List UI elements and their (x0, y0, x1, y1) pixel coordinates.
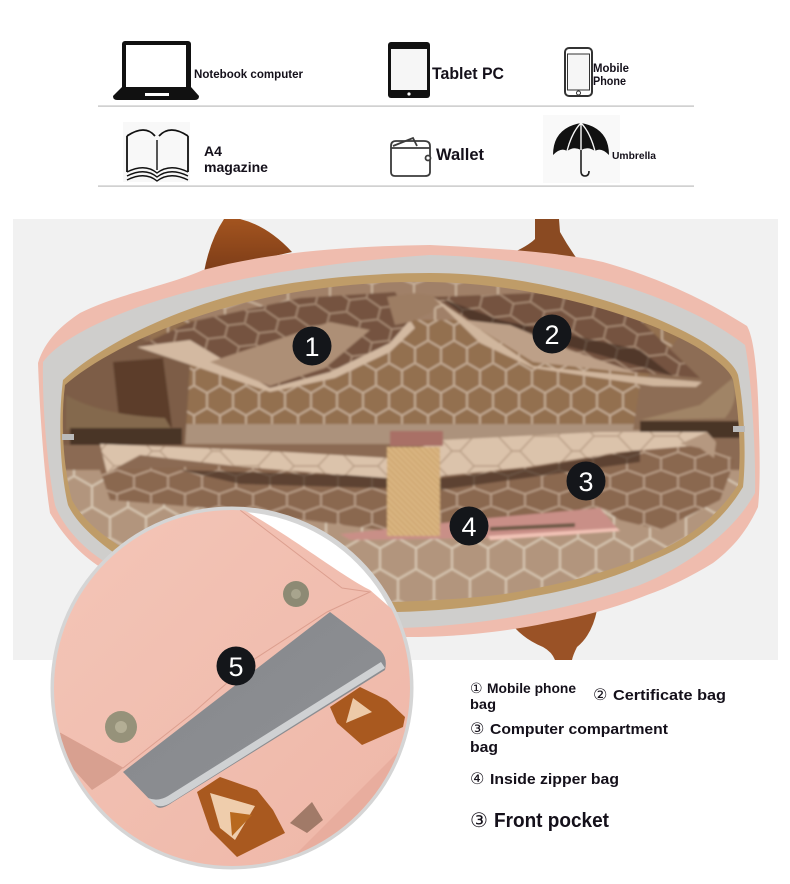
label: A4 magazine: A4 (204, 143, 222, 159)
item 3: bag (470, 739, 498, 756)
number badge 5 (216, 646, 256, 686)
item 2: Certificate bag (613, 687, 726, 704)
icon: laptop (113, 41, 199, 100)
text block: compartment list (470, 680, 726, 832)
flap right fold (680, 432, 716, 458)
icon: umbrella (543, 115, 620, 183)
label: wallet: Wallet (436, 145, 484, 164)
pocket 2 front flap (433, 297, 702, 387)
snap top (283, 581, 309, 607)
tablet edge (148, 662, 385, 806)
item 4: Inside zipper bag (490, 771, 619, 788)
dark gap under flap (180, 450, 640, 490)
number badge 4: 4 (461, 512, 477, 542)
lower body shade (296, 752, 398, 854)
right folds (632, 340, 690, 430)
tan binding (60, 273, 745, 612)
left folds (63, 335, 190, 445)
number badge 2: 2 (544, 320, 560, 350)
number badge 1: 1 (304, 332, 320, 362)
number badge 3 (566, 462, 606, 500)
label: umbrella: Umbrella (612, 151, 656, 162)
item 3: Computer compartment (490, 721, 668, 738)
snap bottom (105, 711, 137, 743)
tablet (123, 612, 386, 808)
central hex lining (150, 320, 690, 425)
inner flap (100, 432, 716, 478)
zipper pocket (340, 508, 617, 540)
label: notebook computer: Notebook computer (194, 67, 303, 81)
handle: top left (204, 219, 292, 272)
lower hex lining (66, 468, 740, 602)
item 1: Mobile phone (487, 680, 576, 696)
icon: magazine (123, 122, 190, 182)
item 5: ③ (470, 808, 488, 832)
handle: top right (510, 219, 583, 267)
legend: size icons (98, 41, 694, 187)
label: A4 magazine: magazine (204, 159, 268, 175)
lens ring (53, 509, 411, 867)
number badge 3: 3 (578, 467, 594, 497)
item 2: ② (593, 685, 607, 704)
zipper pull left (62, 434, 74, 440)
item 3 (470, 719, 668, 756)
panel: photo background (13, 219, 778, 660)
number badge 2 (532, 314, 572, 354)
number badge 1 (292, 326, 332, 366)
label: mobile phone: Mobile (593, 63, 629, 75)
pocket centre fold (387, 293, 442, 325)
item 1: ① (470, 681, 483, 697)
label: phone: Phone (593, 76, 626, 88)
top band of hex lining (188, 282, 540, 321)
inset lens: front pocket (40, 500, 420, 880)
handle: bottom (515, 610, 597, 660)
lens base pink (54, 510, 410, 866)
zipper pull right (733, 426, 745, 432)
bag outer shell (38, 245, 760, 637)
pocket 1 front highlight (137, 320, 415, 392)
icon: mobile phone (565, 48, 592, 96)
zipper band (43, 255, 755, 628)
pocket 2 back wall (433, 292, 700, 378)
darker lower pocket area (100, 440, 735, 530)
pocket 2 inner shadow (443, 299, 673, 376)
strap tab (390, 431, 443, 446)
item 1 (470, 680, 576, 712)
item 1: bag (470, 696, 496, 712)
label: A4 magazine (204, 143, 268, 175)
pocket slot (290, 802, 323, 833)
flap seam (60, 510, 370, 768)
item 5: Front pocket (494, 810, 609, 832)
interior lining (62, 282, 740, 602)
number badge 4 (450, 506, 488, 546)
pocket 1 back wall (137, 292, 412, 390)
pocket seam shade (60, 733, 123, 790)
icon: tablet (388, 42, 430, 98)
icon: wallet (391, 138, 430, 176)
item 3: ③ (470, 719, 484, 738)
handle: lower (197, 777, 285, 857)
canvas strap (387, 447, 440, 536)
label: tablet PC: Tablet PC (432, 64, 504, 83)
number badge 5: 5 (228, 652, 244, 682)
handle: upper (330, 687, 405, 745)
lower tan band (170, 424, 700, 444)
item 4: ④ (470, 769, 484, 788)
bag: open interior photo (38, 219, 760, 660)
